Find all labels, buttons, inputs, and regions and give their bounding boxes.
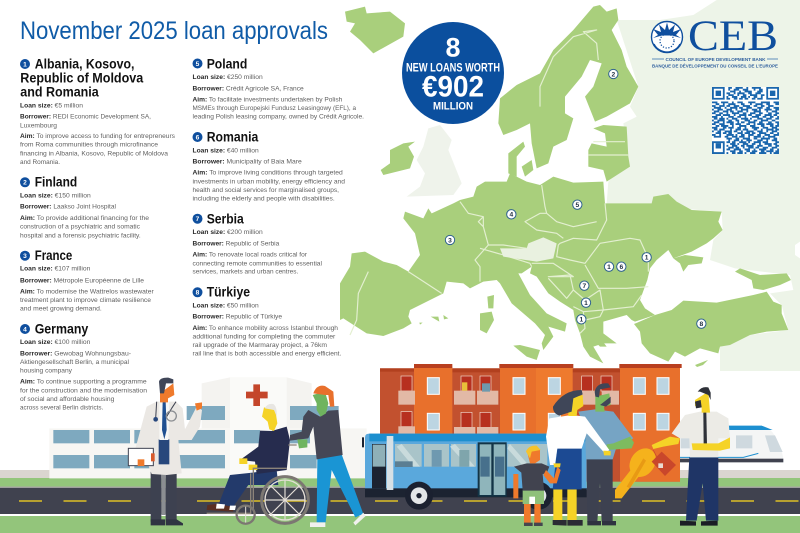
map markers: 6 [619,264,623,271]
map markers: 2 [611,71,615,78]
loan 6: Romania: health and social services for marginalised groups, [192,187,339,194]
street scene [0,364,800,533]
ground and road [0,470,800,533]
loan 4: Germany: of social and affordable housing [20,396,115,403]
loan 5: Poland: Loan size: €250 million [192,74,263,81]
loan 4: Germany: Aktiengesellschaft Berlin, a municipal [20,359,130,366]
loan 5: Poland [192,56,364,121]
loan 4: Germany: across several Berlin districts. [20,404,103,411]
icon: CEB emblem [652,22,682,52]
loan 6: Romania: 6 [196,134,200,141]
callout: 8 new loans worth €902 million: €902 [422,70,484,104]
loan 8: Türkiye: additional funding for completing the commuter [192,333,336,340]
map markers: 1 [579,317,583,324]
loan 6: Romania: Borrower: Municipality of Baia Mare [192,159,302,166]
callout: 8 new loans worth €902 million [402,22,504,124]
loan 7: Serbia: Serbia [207,211,244,226]
map markers: 4 [509,212,513,219]
loan 6: Romania: Loan size: €40 million [192,147,259,154]
loan 4: Germany [20,321,147,411]
map markers: 1 [645,255,649,262]
loan 1: Albania, Kosovo, Republic of Moldova and Romania: 1 [23,61,27,68]
man handing over key [652,387,730,526]
loan 4: Germany: Loan size: €100 million [20,339,91,346]
loan 8: Türkiye: rail upgrade of the Marmaray project, a 76km [192,342,327,349]
train [680,426,783,463]
logo: CEB [652,13,778,68]
loan 7: Serbia [192,211,323,276]
loan 1: Albania, Kosovo, Republic of Moldova and Romania [20,56,176,166]
loan 3: France: Borrower: Métropole Européenne de Lille [20,277,144,284]
loan 1: Albania, Kosovo, Republic of Moldova and Romania: Luxembourg [20,122,57,129]
loan 4: Germany: for the construction and the modernisation [20,387,147,394]
loan 7: Serbia: connecting remote communities to essential [192,260,323,267]
loan 3: France: 3 [23,253,27,260]
loan 8: Türkiye: Türkiye [207,285,250,300]
loan 8: Türkiye: Aim: To enhance mobility across Istanbul through [192,325,338,332]
loan 6: Romania: including the elderly and people with disabilities. [192,195,335,202]
family with child [513,383,634,526]
callout: 8 new loans worth €902 million: NEW LOANS WORTH [406,62,500,74]
logo: CEB: CEB [688,13,778,60]
loan 5: Poland: Borrower: Crédit Agricole SA, France [192,85,304,92]
map of Europe [340,0,800,371]
loan 8: Türkiye: Loan size: €50 million [192,302,259,309]
loan 1: Albania, Kosovo, Republic of Moldova and Romania: Albania, Kosovo, [35,56,134,71]
loan 8: Türkiye: Borrower: Republic of Türkiye [192,314,282,321]
loan 4: Germany: housing company [20,368,73,375]
loan 8: Türkiye: 8 [196,290,200,297]
loan 7: Serbia: Borrower: Republic of Serbia [192,240,280,247]
callout: 8 new loans worth €902 million: 8 [446,32,460,62]
loan 8: Türkiye: rail line that is both accessible and energy efficient. [192,350,341,357]
loan 2: Finland: hospital and a forensic psychiatric facility. [20,232,141,239]
loan 2: Finland: Borrower: Laakso Joint Hospital [20,204,116,211]
loan 2: Finland: Loan size: €150 million [20,192,91,199]
loan 1: Albania, Kosovo, Republic of Moldova and Romania: financing in Albania, Kosovo, Republic of Moldova [20,150,168,157]
father [578,383,634,525]
loan 3: France: Aim: To modernise the Wattrelos wastewater [20,288,154,295]
loan 2: Finland: construction of a psychiatric and somatic [20,224,141,231]
loan 2: Finland: 2 [23,180,27,187]
loan 6: Romania [192,130,345,202]
doctor [128,378,202,525]
loan 2: Finland: Aim: To provide additional financing for the [20,215,149,222]
hospital building [49,377,367,478]
nurse [290,386,366,527]
QR code [712,87,779,154]
loan 1: Albania, Kosovo, Republic of Moldova and Romania: and Romania. [20,159,60,166]
loan 6: Romania: Romania [207,130,259,145]
loan 3: France: France [35,248,72,263]
loan 1: Albania, Kosovo, Republic of Moldova and Romania: and Romania [20,84,99,99]
apartment buildings [380,364,682,482]
loan 7: Serbia: Loan size: €200 million [192,229,263,236]
map markers: 5 [575,202,579,209]
loan 6: Romania: investments in urban mobility, energy efficiency and [192,178,345,185]
loan 4: Germany: 4 [23,326,27,333]
loan 5: Poland: MSMEs through Europejski Fundusz Leasingowy (EFL), a [192,105,356,112]
map markers: 3 [448,237,452,244]
loan 7: Serbia: 7 [196,216,200,223]
loan 8: Türkiye [192,285,341,357]
loan 5: Poland: 5 [196,61,200,68]
loan 1: Albania, Kosovo, Republic of Moldova and Romania: from Roma communities through microfinance [20,142,158,149]
loan 5: Poland: Aim: To facilitate investments undertaken by Polish [192,96,343,103]
mother [546,390,611,526]
loan 4: Germany: Aim: To continue supporting a programme [20,379,147,386]
loan 1: Albania, Kosovo, Republic of Moldova and Romania: Aim: To improve access to funding for entrepreneurs [20,133,176,140]
loan 1: Albania, Kosovo, Republic of Moldova and Romania: Republic of Moldova [20,71,144,86]
loan 4: Germany: Borrower: Gewobag Wohnungsbau- [20,350,131,357]
loan 5: Poland: leading Polish leasing company, owned by Crédit Agricole. [192,114,364,121]
loan 3: France: treatment plant to improve climate resilience [20,297,151,304]
wheelchair user [207,404,308,524]
map markers: 1 [584,300,588,307]
loan 7: Serbia: Aim: To renovate local roads critical for [192,252,308,259]
loan 2: Finland: Finland [35,175,77,190]
loan 1: Albania, Kosovo, Republic of Moldova and Romania: Borrower: REDI Economic Development SA, [20,114,151,121]
loan 2: Finland [20,175,149,239]
title: November 2025 loan approvals [20,17,328,45]
loan 3: France [20,248,154,313]
map markers: 8 [699,321,703,328]
loan 1: Albania, Kosovo, Republic of Moldova and Romania: Loan size: €5 million [20,102,83,110]
loan 4: Germany: Germany [35,321,89,336]
loan 3: France: Loan size: €107 million [20,266,91,273]
house key [615,443,676,498]
loan 3: France: and meet growing demand. [20,306,102,313]
loan 5: Poland: Poland [207,56,247,71]
child [513,446,561,526]
map markers: 7 [582,283,586,290]
loan 6: Romania: Aim: To improve living conditions through targeted [192,170,343,177]
logo: CEB: BANQUE DE DÉVELOPPEMENT DU CONSEIL DE L'EUROPE [652,64,778,68]
logo: CEB: COUNCIL OF EUROPE DEVELOPMENT BANK [666,57,766,62]
map markers: 1 [607,264,611,271]
map markers [445,69,706,328]
bus [362,434,587,510]
loan 7: Serbia: services, markets and urban centres. [192,269,298,276]
callout: 8 new loans worth €902 million: MILLION [433,100,473,112]
